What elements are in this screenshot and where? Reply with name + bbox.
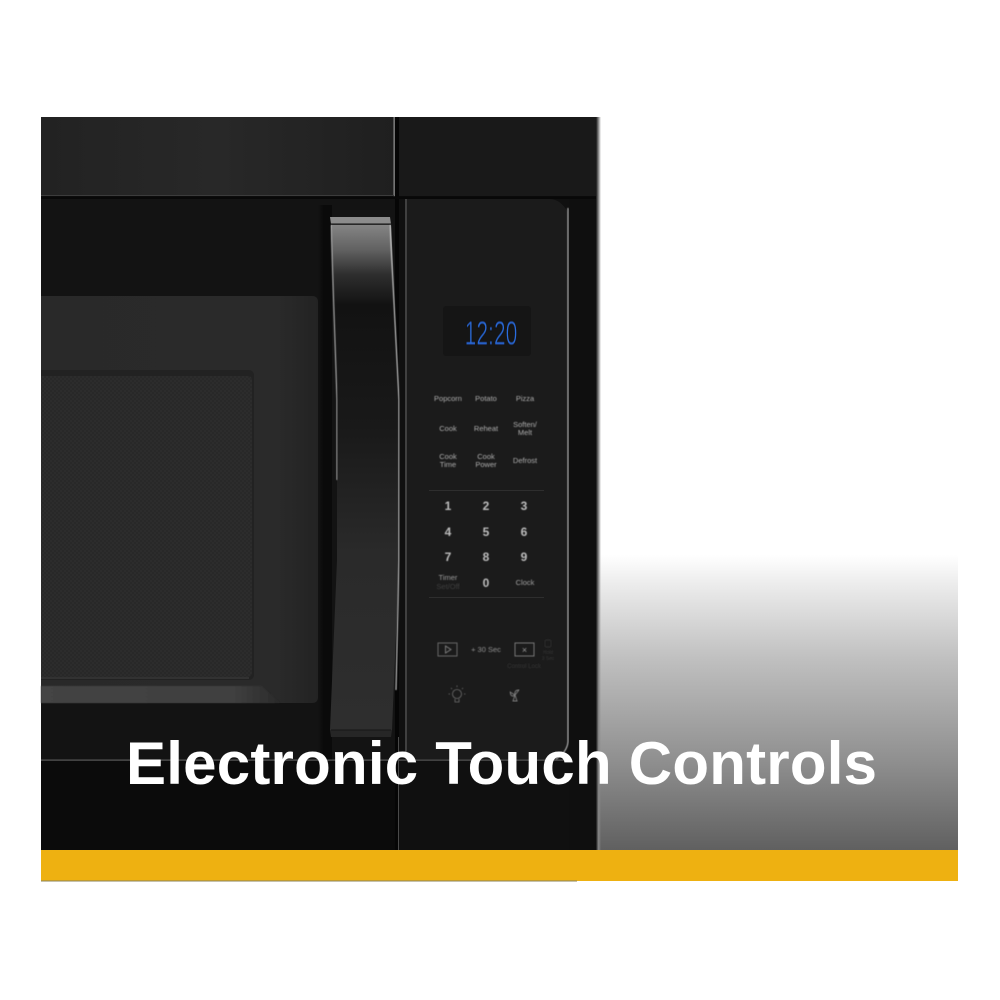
function keys: Soften/ bbox=[513, 420, 538, 429]
number keypad: 6 bbox=[521, 525, 528, 539]
function keys: Power bbox=[475, 460, 497, 469]
number keypad: 1 bbox=[445, 499, 452, 513]
function keys bbox=[434, 394, 538, 469]
lock icon: 3 Sec bbox=[542, 656, 555, 662]
door body band bbox=[41, 199, 395, 760]
window recess shadow bbox=[41, 370, 254, 680]
function keys: Pizza bbox=[516, 394, 535, 403]
handle shadow bbox=[318, 205, 332, 760]
start, add 30 seconds and cancel keys bbox=[438, 640, 555, 670]
right soft edge bbox=[596, 117, 601, 850]
grey gradient backdrop bbox=[597, 555, 958, 850]
icon: fan bbox=[510, 690, 519, 701]
digital display bbox=[443, 306, 531, 356]
number keypad: Set/Off bbox=[436, 582, 461, 591]
number keypad: 3 bbox=[521, 499, 528, 513]
number keypad: Timer bbox=[439, 573, 458, 582]
function keys: Cook bbox=[439, 424, 457, 433]
lower frame lip bbox=[41, 686, 280, 703]
lock icon: Hold bbox=[543, 650, 553, 656]
function keys: Potato bbox=[475, 394, 497, 403]
seam between panels bbox=[41, 117, 598, 850]
number keypad: 8 bbox=[483, 550, 490, 564]
function keys: Cook bbox=[439, 452, 457, 461]
number keypad: Clock bbox=[516, 578, 535, 587]
number keypad bbox=[429, 490, 544, 598]
function keys: Time bbox=[440, 460, 456, 469]
handle bottom cap bbox=[330, 730, 392, 737]
door handle bbox=[330, 217, 399, 737]
function keys: Popcorn bbox=[434, 394, 462, 403]
digital display: 12:20 bbox=[465, 315, 517, 352]
cancel key: × bbox=[522, 645, 527, 655]
panel body bbox=[405, 199, 568, 759]
handle highlights bbox=[331, 225, 337, 480]
handle top cap bbox=[330, 217, 391, 224]
lock icon bbox=[542, 640, 555, 662]
icon: light bulb bbox=[448, 686, 466, 702]
number keypad: 5 bbox=[483, 525, 490, 539]
title: Electronic Touch Controls bbox=[126, 730, 877, 797]
function keys: Cook bbox=[477, 452, 495, 461]
window mesh bbox=[41, 376, 252, 677]
function keys: Melt bbox=[518, 428, 533, 437]
plus 30 seconds label: + 30 Sec bbox=[471, 645, 501, 654]
function keys: Reheat bbox=[474, 424, 499, 433]
start key bbox=[438, 643, 457, 656]
right upper vent panel bbox=[398, 117, 598, 198]
number keypad: 2 bbox=[483, 499, 490, 513]
right margin of cabinet bbox=[569, 199, 598, 850]
panel edge highlights bbox=[556, 208, 568, 759]
number keypad: 4 bbox=[445, 525, 452, 539]
number keypad: 0 bbox=[483, 576, 490, 590]
microwave photo bbox=[41, 117, 601, 850]
control panel bbox=[405, 199, 568, 759]
gold footer bar bbox=[41, 850, 958, 882]
number keypad: 7 bbox=[445, 550, 452, 564]
door window frame bbox=[41, 296, 318, 703]
number keypad: 9 bbox=[521, 550, 528, 564]
lower door seam bbox=[41, 760, 599, 761]
upper vent panel bbox=[41, 117, 394, 195]
control lock label: Control Lock bbox=[507, 664, 542, 670]
function keys: Defrost bbox=[513, 456, 538, 465]
